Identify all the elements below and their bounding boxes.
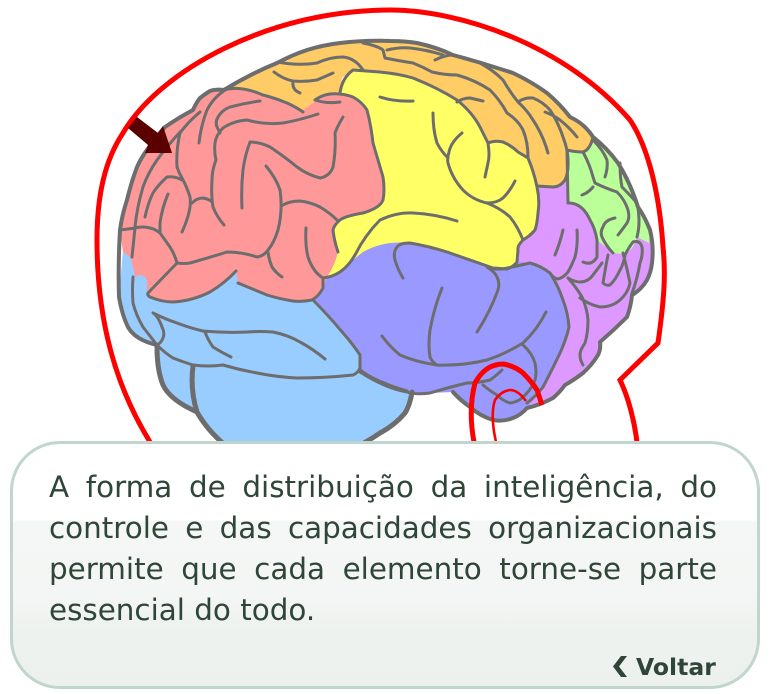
lobe: frontal pink bbox=[120, 89, 384, 302]
green and purple folds bbox=[550, 140, 642, 365]
panel text bbox=[49, 470, 717, 627]
orange inner folds bbox=[315, 70, 539, 278]
periwinkle folds bbox=[313, 263, 569, 403]
panel text: A forma de distribuição da inteligência, do bbox=[49, 470, 717, 504]
lobe: orange bbox=[224, 41, 593, 187]
lobe: occipital purple bbox=[490, 150, 652, 408]
text panel bbox=[10, 441, 760, 689]
lobe: cerebellum and lower blue bbox=[119, 250, 412, 444]
pink and orange border bbox=[224, 88, 384, 252]
lobe: green bbox=[567, 137, 650, 254]
panel text: controle e das capacidades organizacionais bbox=[49, 511, 717, 545]
blue lower folds bbox=[132, 277, 407, 391]
arrow bbox=[128, 117, 172, 153]
cerebellum outline bbox=[157, 347, 412, 446]
back link: Voltar bbox=[636, 653, 716, 681]
thick red arch bbox=[471, 364, 542, 442]
panel text: essencial do todo. bbox=[49, 593, 315, 627]
yellow inner folds bbox=[323, 97, 523, 278]
lobe: temporal periwinkle bbox=[313, 225, 569, 421]
brain bbox=[119, 41, 653, 446]
thin red inner curve bbox=[493, 390, 526, 442]
head outline bbox=[97, 10, 664, 442]
pink lower folds bbox=[120, 90, 343, 302]
outer contour bbox=[119, 41, 653, 421]
fold lines bbox=[120, 43, 642, 403]
panel text: permite que cada elemento torne-se parte bbox=[49, 552, 717, 586]
lobe: parietal yellow bbox=[320, 70, 539, 277]
